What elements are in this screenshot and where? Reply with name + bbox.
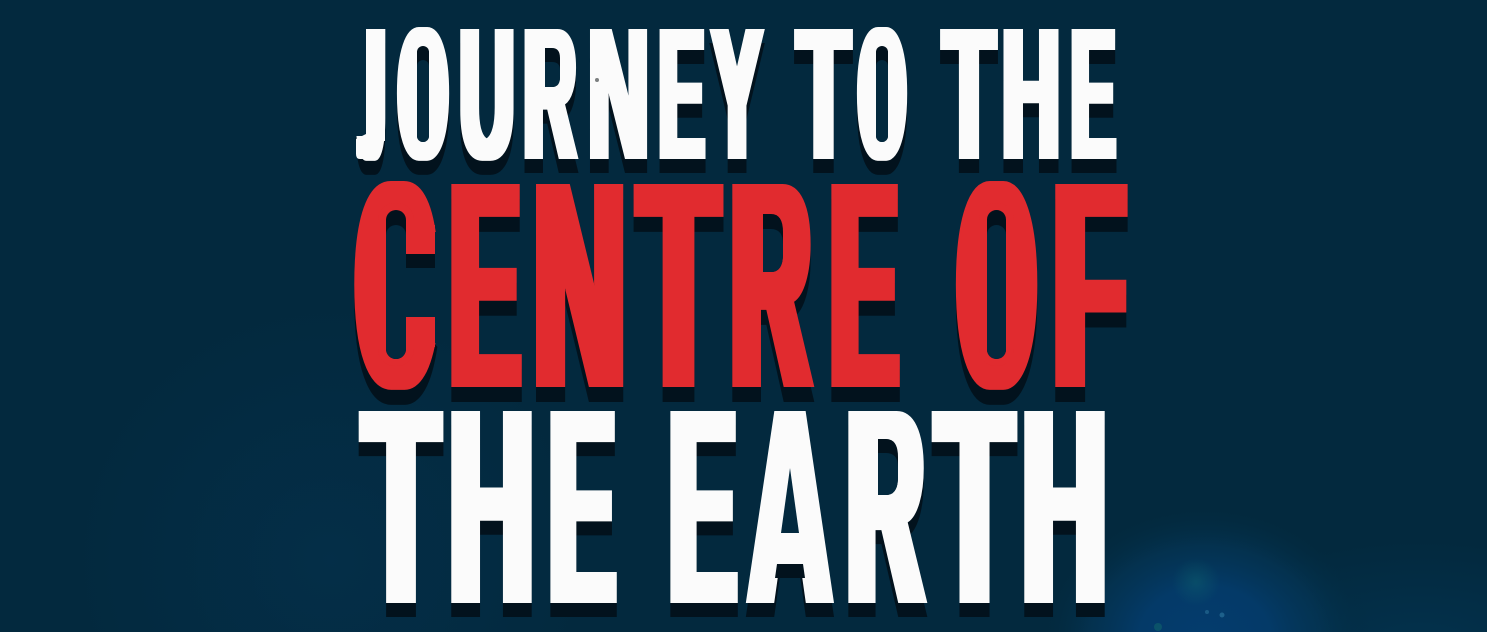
title line: CENTRE OF: F	[1054, 120, 1125, 450]
title line: CENTRE OF: C	[356, 120, 434, 450]
title line: CENTRE OF	[356, 120, 1125, 450]
title line: THE EARTH	[363, 351, 1107, 632]
title line: CENTRE OF: E	[451, 120, 519, 450]
title line: CENTRE OF: R	[732, 120, 810, 450]
title line: CENTRE OF: T	[639, 120, 718, 450]
letter counter shaping	[350, 24, 1014, 578]
title line: CENTRE OF: E	[831, 120, 897, 450]
title	[350, 0, 1125, 632]
title line: CENTRE OF: N	[534, 120, 625, 450]
title line: JOURNEY TO THE	[359, 0, 1115, 200]
title line: CENTRE OF: O	[958, 120, 1035, 450]
